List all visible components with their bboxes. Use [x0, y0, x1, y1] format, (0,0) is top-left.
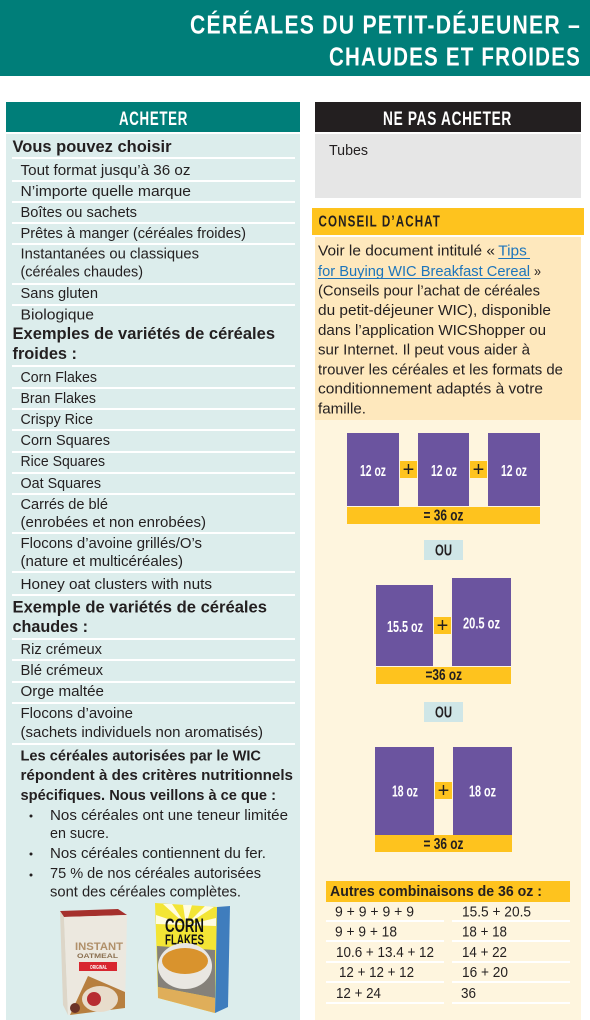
nutrition criteria text: Les céréales autorisées par le WIC [20, 748, 262, 764]
table: autres combinaisons: 12 + 12 + 12 [339, 965, 414, 981]
diagram: 12 + 12 + 12: = 36 oz [424, 508, 464, 525]
list: vous pouvez choisir: Tout format jusqu’à 36 oz [20, 163, 190, 179]
panel: conseil d'achat: sur Internet. Il peut vous aider à [318, 342, 531, 358]
icon: instant oatmeal box: INSTANT [75, 941, 123, 953]
list: variétés de céréales chaudes: Riz crémeux [20, 642, 103, 658]
table: autres combinaisons [326, 881, 570, 1004]
diagram: 18 + 18 [375, 747, 512, 853]
diagram: 12 + 12 + 12: + [403, 459, 414, 481]
label: ou: OU [435, 542, 452, 560]
panel: conseil d'achat [312, 208, 584, 420]
list: variétés de céréales chaudes: Exemple de variétés de céréales [12, 598, 267, 616]
list: variétés de céréales froides: Crispy Rice [20, 412, 93, 428]
list: variétés de céréales froides [12, 325, 275, 593]
table: autres combinaisons: 14 + 22 [462, 945, 507, 961]
list: variétés de céréales froides: Rice Squares [20, 454, 105, 470]
panel: conseil d'achat: Tips [498, 244, 527, 260]
diagram: 18 + 18: 18 oz [469, 784, 496, 801]
list: variétés de céréales chaudes: (sachets individuels non aromatisés) [20, 725, 263, 741]
nutrition criteria text: Nos céréales contiennent du fer. [50, 846, 266, 862]
panel: conseil d'achat: for Buying WIC Breakfast Cereal [318, 264, 530, 280]
table: autres combinaisons: 36 [461, 986, 476, 1002]
diagram: 12 + 12 + 12: 12 oz [431, 463, 457, 480]
panel: conseil d'achat: conditionnement adaptés à votre [318, 381, 543, 397]
nutrition criteria text: sont des céréales complètes. [50, 884, 241, 900]
table: autres combinaisons: 12 + 24 [336, 986, 381, 1002]
list: variétés de céréales froides: Oat Squares [20, 476, 101, 492]
diagram: 15.5 + 20.5: =36 oz [426, 667, 462, 684]
label: ou [424, 540, 463, 560]
icon: corn flakes box: FLAKES [165, 932, 204, 948]
diagram: 12 + 12 + 12: 12 oz [360, 463, 386, 480]
list: variétés de céréales froides: Bran Flakes [20, 391, 96, 407]
list: variétés de céréales froides: froides : [12, 345, 77, 363]
list: variétés de céréales chaudes: chaudes : [12, 618, 88, 636]
list: vous pouvez choisir: N’importe quelle marque [20, 184, 191, 200]
list: variétés de céréales chaudes: Flocons d’avoine [20, 706, 133, 722]
table: autres combinaisons: 9 + 9 + 18 [335, 925, 397, 941]
diagram: 18 + 18: + [438, 780, 449, 802]
list: variétés de céréales froides: Corn Flakes [20, 370, 97, 386]
list: variétés de céréales froides: Exemples de variétés de céréales [12, 325, 275, 343]
table: autres combinaisons: Autres combinaisons de 36 oz : [330, 884, 542, 900]
list: vous pouvez choisir: Boîtes ou sachets [20, 205, 137, 221]
diagram: 15.5 + 20.5: 20.5 oz [463, 615, 500, 632]
icon: corn flakes box [155, 903, 230, 1013]
diagram: 12 + 12 + 12: + [473, 459, 484, 481]
list: vous pouvez choisir: (céréales chaudes) [20, 264, 143, 280]
diagram: 15.5 + 20.5: + [437, 615, 448, 637]
icon: instant oatmeal box: OATMEAL [77, 954, 118, 960]
list: variétés de céréales froides: Corn Squares [20, 433, 110, 449]
table: autres combinaisons: 18 + 18 [462, 925, 507, 941]
panel: acheter: ACHETER [119, 108, 188, 130]
label: ou [424, 702, 463, 722]
list: variétés de céréales froides: Flocons d’avoine grillés/O’s [20, 536, 202, 552]
list: variétés de céréales chaudes [12, 598, 267, 741]
panel: conseil d'achat: du petit-déjeuner WIC), disponible [318, 303, 551, 319]
table: autres combinaisons: 9 + 9 + 9 + 9 [335, 905, 414, 921]
icon: instant oatmeal box: ORIGINAL [90, 965, 107, 971]
list: vous pouvez choisir [12, 138, 246, 324]
diagram: 12 + 12 + 12: 12 oz [501, 463, 527, 480]
panel: conseil d'achat: (Conseils pour l’achat de céréales [318, 283, 540, 299]
diagram: 18 + 18: 18 oz [392, 784, 418, 801]
title banner [0, 0, 590, 76]
diagram: 18 + 18: = 36 oz [424, 836, 464, 853]
list: variétés de céréales froides: Honey oat clusters with nuts [20, 577, 212, 593]
panel: ne pas acheter [315, 102, 581, 198]
nutrition criteria text [20, 748, 293, 900]
list: variétés de céréales froides: Carrés de blé [20, 497, 108, 513]
nutrition criteria text: Nos céréales ont une teneur limitée [50, 808, 288, 824]
panel: ne pas acheter: NE PAS ACHETER [383, 108, 512, 130]
panel: conseil d'achat: » [534, 264, 541, 280]
table: autres combinaisons: 15.5 + 20.5 [462, 905, 531, 921]
nutrition criteria text: répondent à des critères nutritionnels [20, 768, 293, 784]
panel: conseil d'achat: CONSEIL D’ACHAT [318, 214, 441, 231]
diagram: 15.5 + 20.5 [376, 578, 511, 684]
panel: conseil d'achat: dans l’application WICShopper ou [318, 323, 546, 339]
list: vous pouvez choisir: Sans gluten [20, 286, 98, 302]
panel: conseil d'achat: Voir le document intitulé « [318, 244, 495, 260]
list: vous pouvez choisir: Biologique [20, 308, 94, 324]
list: variétés de céréales froides: (enrobées et non enrobées) [20, 515, 206, 531]
list: vous pouvez choisir: Vous pouvez choisir [12, 138, 172, 156]
label: ou: OU [435, 704, 452, 722]
table: autres combinaisons: 10.6 + 13.4 + 12 [336, 945, 434, 961]
panel: ne pas acheter: Tubes [329, 143, 368, 159]
list: variétés de céréales chaudes: Orge maltée [20, 684, 104, 700]
table: autres combinaisons: 16 + 20 [462, 965, 508, 981]
icon: corn flakes box: CORN [165, 916, 204, 937]
list: variétés de céréales chaudes: Blé crémeux [20, 663, 104, 679]
panel: conseil d'achat: trouver les céréales et les formats de [318, 362, 563, 378]
panel: conseil d'achat: famille. [318, 401, 366, 417]
diagram: 15.5 + 20.5: 15.5 oz [387, 619, 423, 636]
diagram: 12 + 12 + 12 [347, 433, 540, 525]
list: variétés de céréales froides: (nature et multicéréales) [20, 554, 183, 570]
nutrition criteria text: 75 % de nos céréales autorisées [50, 866, 261, 882]
icon: instant oatmeal box [60, 909, 127, 1015]
nutrition criteria text: spécifiques. Nous veillons à ce que : [20, 788, 276, 804]
panel: size combinations [315, 420, 581, 1020]
list: vous pouvez choisir: Instantanées ou classiques [20, 246, 199, 262]
list: vous pouvez choisir: Prêtes à manger (céréales froides) [20, 226, 246, 242]
panel: acheter [6, 102, 300, 1020]
nutrition criteria text: en sucre. [50, 826, 109, 842]
